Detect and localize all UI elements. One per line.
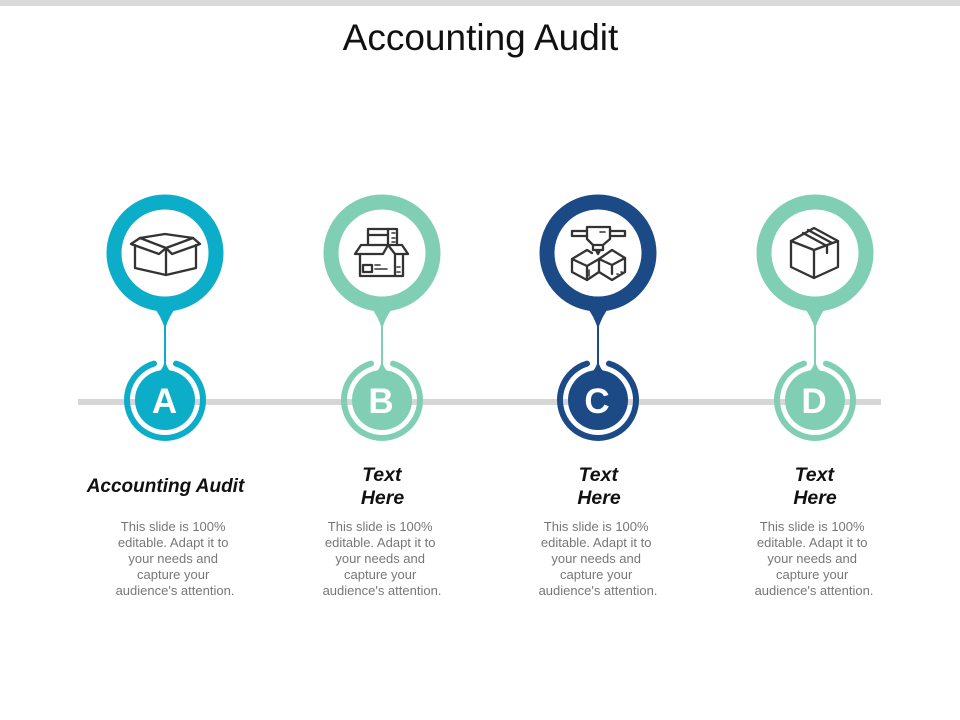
top grey band <box>0 0 960 6</box>
icon: 3D printer and cubes <box>572 227 625 280</box>
icon: closed box <box>791 228 838 278</box>
step D <box>755 202 873 598</box>
heading B: Here <box>361 487 404 509</box>
body text D: capture your <box>776 567 849 582</box>
pin C <box>547 202 649 365</box>
title: Accounting Audit <box>343 17 619 58</box>
body text B: editable. Adapt it to <box>325 535 435 550</box>
body text C: audience's attention. <box>539 583 657 598</box>
badge D <box>777 360 853 438</box>
icon: box with packages <box>355 229 408 276</box>
step A <box>86 202 245 598</box>
body text C: your needs and <box>551 551 641 566</box>
pin D <box>764 202 866 365</box>
body text C: editable. Adapt it to <box>541 535 651 550</box>
step B <box>323 202 441 598</box>
body text B: capture your <box>344 567 417 582</box>
body text D: This slide is 100% <box>760 519 865 534</box>
badge A: A <box>152 382 177 421</box>
body text A: audience's attention. <box>116 583 234 598</box>
body text B: This slide is 100% <box>328 519 433 534</box>
body text A: editable. Adapt it to <box>118 535 228 550</box>
heading D: Text <box>795 464 835 486</box>
heading A: Accounting Audit <box>86 476 245 497</box>
body text D: audience's attention. <box>755 583 873 598</box>
body text B: audience's attention. <box>323 583 441 598</box>
heading B: Text <box>362 464 403 486</box>
body text D: your needs and <box>767 551 857 566</box>
body text A: This slide is 100% <box>121 519 226 534</box>
pin B <box>331 202 433 365</box>
heading D: Here <box>793 487 837 509</box>
badge B <box>344 360 420 438</box>
badge C <box>560 360 636 438</box>
body text D: editable. Adapt it to <box>757 535 867 550</box>
icon: open box <box>131 234 200 275</box>
body text B: your needs and <box>335 551 425 566</box>
pin A <box>114 202 216 365</box>
body text C: capture your <box>560 567 633 582</box>
badge B: B <box>368 382 394 421</box>
body text C: This slide is 100% <box>544 519 649 534</box>
body text A: capture your <box>137 567 210 582</box>
badge C: C <box>584 382 610 421</box>
body text A: your needs and <box>128 551 218 566</box>
heading C: Here <box>577 487 621 509</box>
badge A <box>127 360 203 438</box>
step C <box>539 202 657 598</box>
horizontal timeline bar <box>78 399 881 405</box>
heading C: Text <box>579 464 619 486</box>
badge D: D <box>801 382 827 421</box>
